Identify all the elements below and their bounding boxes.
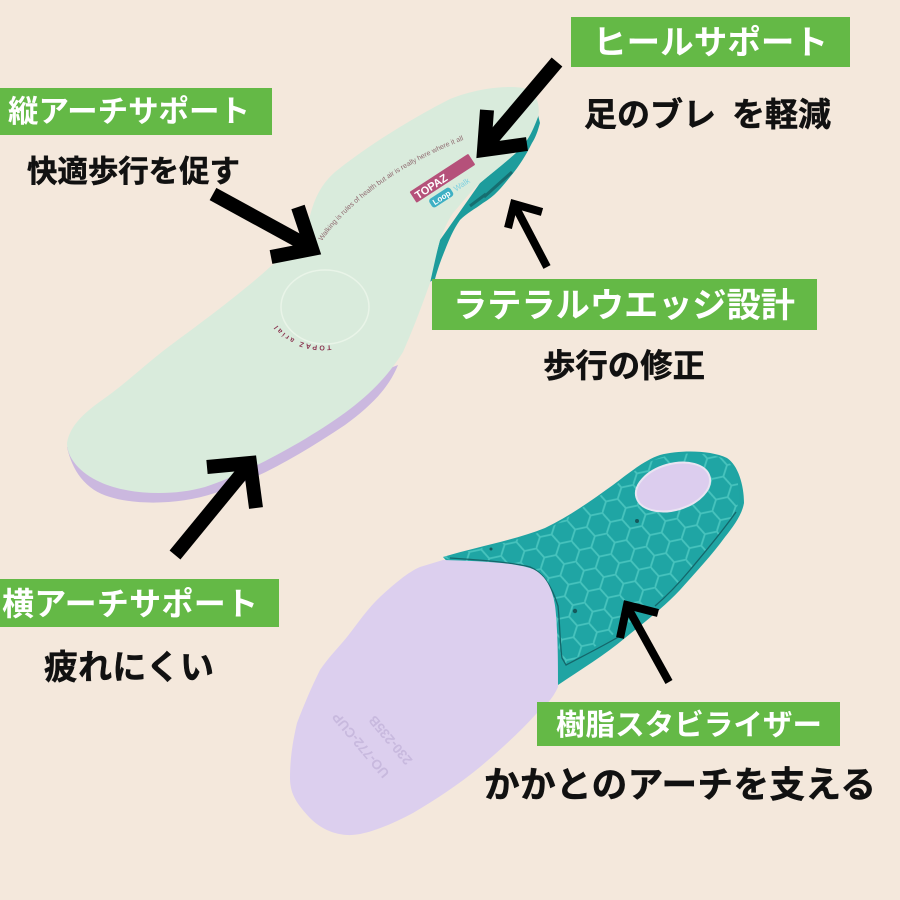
dark rim line (450, 512, 736, 665)
arrow: lateral wedge (508, 204, 547, 267)
caption: longitudinal arch: 快適歩行を促す (27, 155, 240, 189)
insole print: walking slogan: Walking is rules of health but air is really here where it all (318, 135, 464, 240)
caption: resin stabilizer: かかとのアーチを支える (484, 765, 876, 805)
moulded size text: 230-235B (366, 712, 415, 768)
circular mark: TOPAZ arial (274, 326, 332, 350)
heading: lateral wedge (432, 279, 817, 330)
hex stabilizer (443, 453, 739, 665)
caption: transverse arch: 疲れにくい (44, 649, 214, 687)
heading: longitudinal arch support: 縦アーチサポート (8, 95, 250, 129)
arrow: heel support (484, 62, 557, 150)
caption: lateral wedge: 歩行の修正 (543, 348, 705, 384)
heading: transverse arch support (0, 579, 279, 627)
circular mark (274, 270, 370, 350)
arrow: resin stabilizer (620, 605, 669, 682)
green top surface (67, 87, 539, 493)
dark vents on heel side (470, 172, 512, 206)
heading: resin stabilizer (537, 702, 840, 746)
heading: transverse arch support: 横アーチサポート (2, 586, 258, 622)
top insole (67, 87, 540, 503)
moulded size text: UO-772-CUP (329, 710, 392, 781)
bottom insole (290, 452, 744, 835)
teal base (443, 452, 744, 685)
heading: longitudinal arch support (0, 88, 272, 135)
heading: heel support (571, 17, 850, 67)
logo tags: Walk (452, 176, 472, 193)
logo tags: Loop (431, 189, 452, 207)
heading: resin stabilizer: 樹脂スタビライザー (556, 709, 822, 742)
logo tags (410, 154, 483, 215)
heel oval pad (630, 454, 716, 520)
heading: heel support: ヒールサポート (593, 25, 828, 62)
teal side of heel (428, 115, 540, 283)
vent holes (490, 519, 639, 613)
pink underside (67, 365, 398, 503)
arrow: transverse arch (175, 463, 256, 555)
heading: lateral wedge: ラテラルウエッジ設計 (453, 287, 795, 325)
logo tags: TOPAZ (413, 172, 450, 202)
caption: heel support: を軽減 (732, 96, 831, 133)
arrow: longitudinal arch (213, 194, 312, 257)
lilac forefoot pad (290, 560, 558, 835)
caption: heel support: 足のブレ (584, 96, 716, 133)
